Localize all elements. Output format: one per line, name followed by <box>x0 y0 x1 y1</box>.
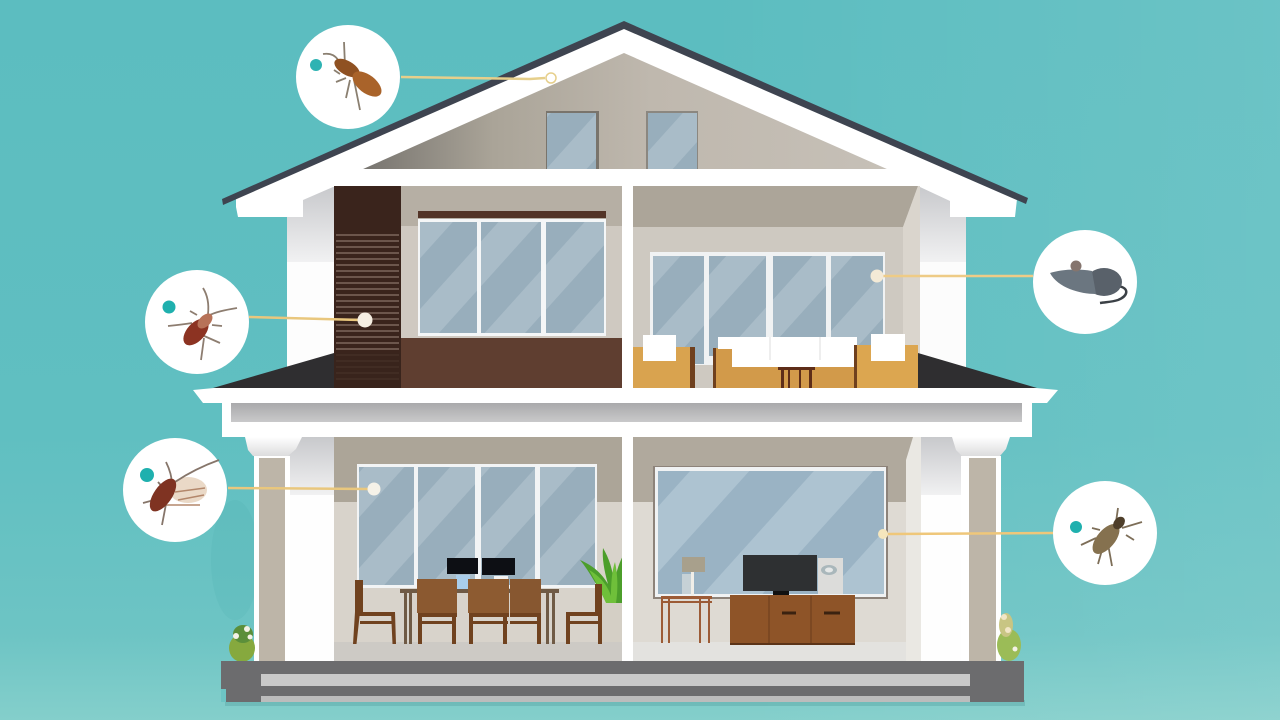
media box <box>818 558 843 594</box>
slats over lower roof <box>334 353 401 388</box>
icon: winged insect <box>143 460 219 525</box>
leader line <box>228 488 370 489</box>
icon: ant <box>323 42 386 110</box>
ceiling beam <box>333 169 920 186</box>
lower right room <box>633 437 921 661</box>
circle <box>145 270 249 374</box>
mottled background shade <box>211 500 259 620</box>
side wall lower <box>906 437 921 661</box>
upper left room <box>401 186 622 388</box>
lower right window <box>653 466 888 599</box>
circle <box>296 25 400 129</box>
left capital <box>245 437 302 456</box>
leader line <box>401 77 545 79</box>
marker dot <box>140 468 154 482</box>
leader line <box>880 275 1033 277</box>
monitors <box>447 558 515 575</box>
leader end <box>546 73 556 83</box>
side wall <box>903 186 920 388</box>
icon: tan beetle <box>1081 508 1142 566</box>
tv <box>743 555 817 595</box>
lower left room <box>334 437 625 661</box>
dining table <box>400 589 559 644</box>
roof dark edge <box>222 21 1028 205</box>
attic window left <box>546 111 599 170</box>
base shadow <box>225 700 1025 706</box>
callout: tan beetle <box>878 481 1157 585</box>
left column <box>254 456 290 661</box>
floor slab <box>193 388 1058 437</box>
plant <box>580 548 625 642</box>
marker dot <box>162 300 176 314</box>
coffee table <box>778 367 815 388</box>
left upper outer wall <box>287 186 334 388</box>
leader line <box>249 317 360 320</box>
leader end <box>368 482 380 496</box>
callout: winged bug <box>123 438 380 542</box>
upper right room <box>633 186 920 388</box>
lower roof right <box>918 353 1037 388</box>
left armchair <box>633 335 695 388</box>
right upper outer wall <box>920 186 966 388</box>
callout: roof ant <box>296 25 556 129</box>
lower outer wall right <box>906 437 969 661</box>
right column <box>961 456 1001 661</box>
side chair right <box>566 584 602 644</box>
laptop and paper <box>456 575 508 589</box>
slab recess <box>231 403 1022 422</box>
foundation <box>221 661 1024 702</box>
leader end <box>878 529 888 539</box>
centre divider upper <box>622 185 633 389</box>
side chair left <box>353 580 396 644</box>
attic window right <box>646 111 698 170</box>
centre divider lower <box>622 437 633 661</box>
leader end <box>358 312 372 328</box>
marker dot <box>1070 521 1082 533</box>
dining chair 1 <box>417 579 457 644</box>
left bush <box>229 625 255 662</box>
circle <box>1033 230 1137 334</box>
side table <box>661 596 712 643</box>
sofa <box>713 337 857 388</box>
lower roof left <box>213 353 334 388</box>
lower left window <box>357 464 597 588</box>
cabinet <box>730 595 855 645</box>
icon: red bug <box>168 288 237 360</box>
right armchair <box>854 334 918 388</box>
marker dot <box>310 59 322 71</box>
right bush <box>997 613 1021 661</box>
leader end <box>870 270 884 282</box>
callout: mouse <box>870 230 1137 334</box>
slatted dark panel <box>334 186 401 388</box>
right capital <box>952 437 1010 456</box>
brown window lintel <box>418 211 606 218</box>
upper left window <box>418 219 606 336</box>
house <box>193 21 1058 702</box>
lamp <box>682 557 705 596</box>
callout: wall beetle <box>145 270 372 374</box>
dining chair 3 <box>510 579 541 644</box>
ceiling <box>633 186 918 227</box>
dining chair 2 <box>468 579 509 644</box>
circle <box>123 438 227 542</box>
leader line <box>886 533 1053 534</box>
upper right window <box>650 252 885 365</box>
brown lower wall panel <box>401 338 622 388</box>
icon: mouse <box>1050 260 1126 303</box>
slab beam lower <box>222 422 1032 437</box>
lower outer wall left <box>285 437 334 661</box>
attic wall <box>362 53 888 170</box>
circle <box>1053 481 1157 585</box>
roof fascia <box>236 28 1017 217</box>
